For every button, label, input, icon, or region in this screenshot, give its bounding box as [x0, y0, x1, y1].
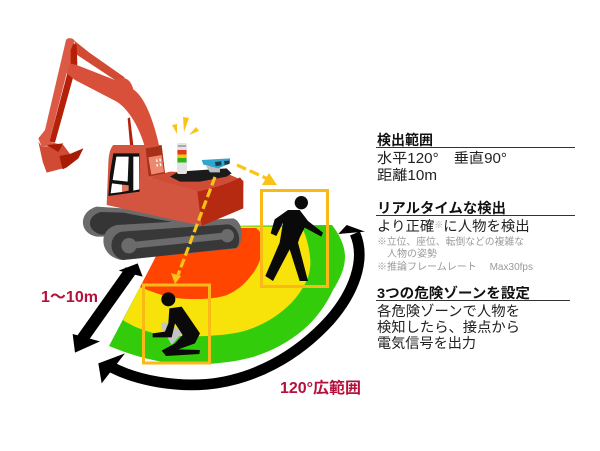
- panel: detection range: 距離10m: [377, 167, 437, 184]
- label: range distance: 1〜10m: [41, 289, 98, 306]
- upper body: [107, 145, 243, 226]
- panel: realtime detection: より正確: [377, 219, 434, 235]
- boom, arm and bucket: [38, 38, 159, 173]
- detection box: crouching person: [144, 285, 210, 363]
- body and tracks: [83, 145, 243, 260]
- bucket: [38, 142, 83, 173]
- panel: realtime detection: 人物の姿勢: [387, 247, 437, 260]
- dark arm strip: [49, 42, 77, 143]
- panel: detection range: [376, 132, 575, 184]
- dark rear side: [197, 177, 243, 226]
- signal tower light: [177, 143, 187, 174]
- icon: walking person: [265, 196, 323, 281]
- sensor base: [170, 168, 232, 182]
- icon: crouching person: [153, 292, 200, 356]
- hydraulic rod: [128, 117, 133, 145]
- rear track: [83, 207, 193, 237]
- panel: three danger zones: 電気信号を出力: [377, 335, 476, 352]
- panel: three danger zones: 検知したら、接点から: [377, 319, 520, 336]
- boom strut: [74, 41, 125, 81]
- panel: realtime detection: ※立位、座位、転倒などの複雑な: [377, 235, 524, 248]
- sensor camera: [202, 158, 230, 172]
- range double arrow: [73, 263, 143, 353]
- panel: detection range: 検出範囲: [377, 132, 433, 148]
- dashed arrow to walking person: [237, 165, 277, 185]
- panel: realtime detection: ※推論フレームレート Max30fps: [377, 260, 533, 273]
- alert sparks: [172, 117, 199, 135]
- dashed arrow to crouching person: [171, 177, 215, 284]
- cab side panel: [146, 146, 165, 177]
- panel: detection range: 水平120° 垂直90°: [377, 150, 507, 167]
- green zone: [109, 225, 345, 364]
- 120 degree arc arrow: [98, 225, 365, 385]
- label: wide angle: 120°広範囲: [280, 378, 361, 397]
- panel: realtime detection: ※: [434, 220, 443, 230]
- panel: three danger zones: [376, 285, 570, 352]
- panel: three danger zones: 3つの危険ゾーンを設定: [377, 285, 530, 301]
- panel: realtime detection: リアルタイムな検出: [377, 200, 506, 216]
- panel: three danger zones: 各危険ゾーンで人物を: [377, 303, 520, 320]
- yellow zone: [123, 226, 310, 336]
- panel: realtime detection: に人物を検出: [443, 218, 530, 235]
- cab window: [108, 153, 140, 196]
- danger zone fan chart: [109, 225, 345, 364]
- arm: [38, 38, 75, 147]
- front track: [103, 218, 242, 260]
- excavator: [38, 38, 243, 260]
- red zone: [140, 228, 263, 299]
- detection box: walking person: [262, 190, 328, 286]
- boom: [67, 63, 159, 147]
- panel: realtime detection: [376, 200, 575, 273]
